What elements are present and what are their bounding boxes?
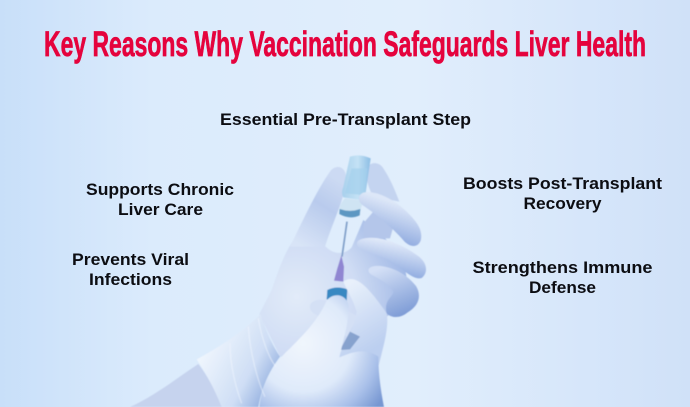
syringe barrel bbox=[326, 298, 343, 357]
ring finger bbox=[368, 266, 419, 317]
label: Boosts Post-Transplant Recovery bbox=[463, 174, 662, 213]
vial liquid shine bbox=[345, 168, 367, 195]
label: Supports Chronic Liver Care: Supports Chronic bbox=[86, 180, 234, 199]
small finger behind syringe bbox=[310, 300, 358, 337]
shadow under finger bbox=[340, 332, 360, 350]
middle finger bbox=[357, 238, 426, 278]
label: Supports Chronic Liver Care: Liver Care bbox=[118, 200, 203, 219]
label: Boosts Post-Transplant Recovery: Recovery bbox=[524, 194, 602, 213]
label: Strengthens Immune Defense bbox=[472, 258, 652, 297]
label: Strengthens Immune Defense: Defense bbox=[529, 278, 596, 297]
illustration: gloved hands with vial and syringe bbox=[130, 155, 426, 407]
label: Strengthens Immune Defense: Strengthens Immune bbox=[472, 258, 652, 277]
front second finger bbox=[337, 279, 387, 367]
label: Essential Pre-Transplant Step: Essential Pre-Transplant Step bbox=[220, 110, 471, 129]
label: Prevents Viral Infections: Prevents Viral bbox=[72, 250, 189, 269]
vial cap bbox=[339, 198, 364, 217]
syringe collar bbox=[327, 287, 347, 301]
needle bbox=[342, 222, 347, 257]
bare forearm bbox=[130, 364, 223, 407]
shaded web between fingers bbox=[363, 212, 393, 238]
rear hand palm bbox=[259, 220, 410, 357]
label: Boosts Post-Transplant Recovery: Boosts Post-Transplant bbox=[463, 174, 662, 193]
vial glass bbox=[342, 155, 371, 201]
index finger bbox=[359, 192, 421, 246]
label: Prevents Viral Infections: Infections bbox=[89, 270, 172, 289]
syringe lower part bbox=[327, 330, 341, 357]
rear thumb bbox=[290, 167, 346, 247]
label: Supports Chronic Liver Care bbox=[86, 180, 234, 219]
label: Prevents Viral Infections bbox=[72, 250, 189, 289]
front hand bbox=[259, 295, 384, 407]
syringe hub bbox=[334, 255, 344, 282]
upper finger behind vial bbox=[366, 163, 399, 202]
vial cap ring bbox=[339, 209, 360, 217]
cuff crease bbox=[230, 318, 276, 403]
glove cuff bbox=[197, 314, 280, 407]
